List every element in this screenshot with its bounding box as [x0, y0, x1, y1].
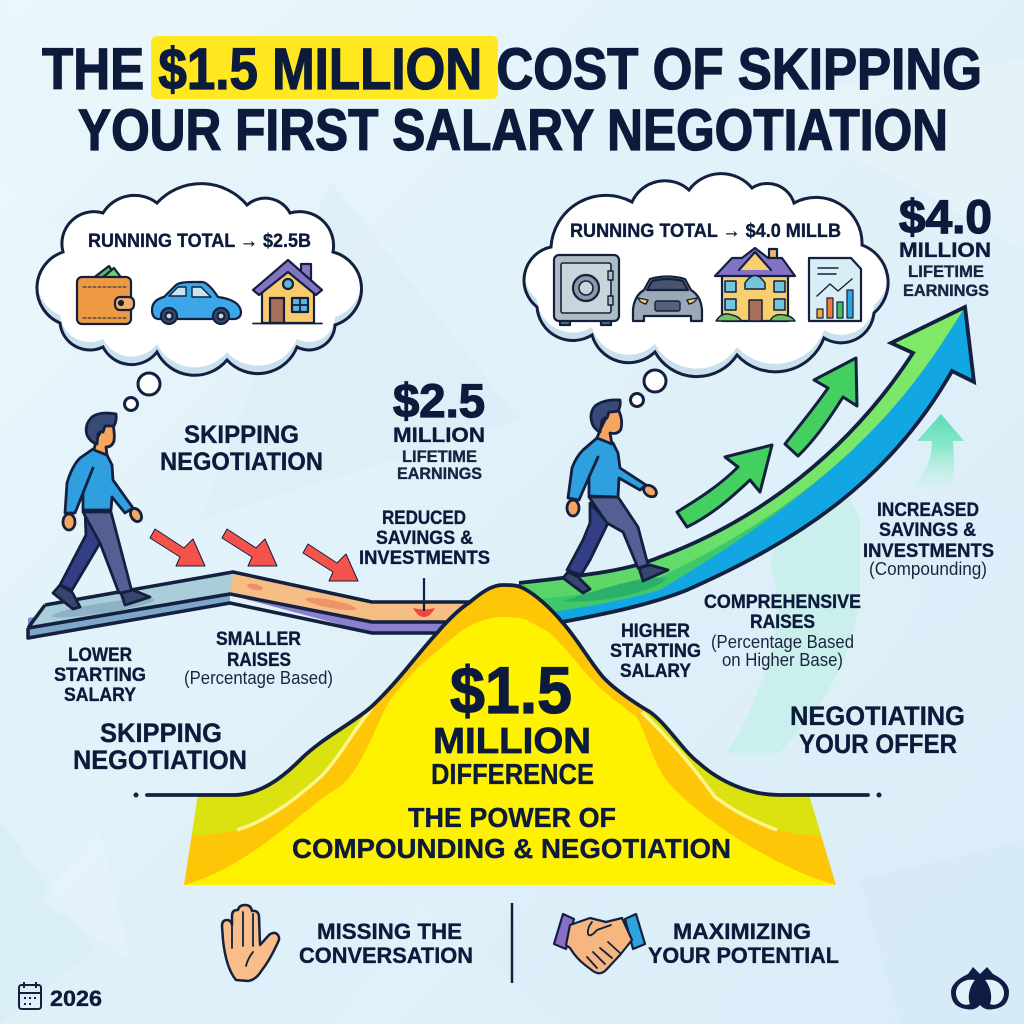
icon: handshake	[554, 914, 645, 973]
icon: blue car	[152, 282, 241, 324]
label: comprehensive raises: RAISES	[750, 611, 815, 633]
label: comprehensive raises: on Higher Base)	[722, 650, 843, 670]
label: lower starting salary: STARTING	[54, 664, 146, 686]
label: reduced savings: INVESTMENTS	[359, 547, 490, 569]
icon: stop hand	[222, 905, 279, 981]
declining path platform	[28, 572, 480, 638]
heading: negotiating your offer: NEGOTIATING	[790, 701, 965, 731]
front leg	[83, 512, 132, 593]
stat: $1.5 million difference	[431, 653, 594, 791]
heading: skipping negotiation lower: SKIPPING	[100, 718, 222, 748]
green arrow 2	[785, 358, 857, 456]
thought cloud: negotiating	[524, 166, 888, 406]
label: missing the conversation	[299, 919, 473, 968]
icon: report chart	[809, 258, 861, 321]
subheading: power of compounding: COMPOUNDING & NEGOTIATION	[292, 833, 731, 864]
stat: $4.0 million: $4.0	[899, 190, 992, 243]
label: smaller raises: (Percentage Based)	[184, 668, 333, 688]
heading: skipping negotiation lower	[73, 718, 247, 775]
label: increased savings: INVESTMENTS	[863, 540, 994, 562]
label: increased savings: SAVINGS &	[879, 519, 976, 541]
subheading: power of compounding: THE POWER OF	[408, 802, 616, 833]
label: reduced savings: SAVINGS &	[376, 527, 473, 549]
label: reduced savings: REDUCED	[382, 507, 466, 529]
stat: $4.0 million: MILLION	[899, 239, 991, 262]
heading: skipping negotiation top	[160, 421, 323, 476]
baseline right dots	[876, 792, 882, 798]
stat: $1.5 million difference: $1.5	[450, 653, 572, 727]
yellow hill	[147, 585, 868, 885]
subheading: power of compounding	[292, 802, 731, 864]
baseline left dots	[134, 792, 138, 798]
green arrow 1	[677, 445, 772, 527]
label: maximizing your potential: MAXIMIZING	[673, 919, 811, 944]
label: comprehensive raises: COMPREHENSIVE	[704, 591, 861, 613]
back leg	[60, 510, 100, 590]
icon: wallet	[77, 266, 134, 324]
icon: sports car	[633, 276, 702, 321]
title	[42, 36, 982, 163]
stat: $2.5 million: LIFETIME	[402, 447, 477, 466]
icon: calendar with year: 2026	[50, 986, 102, 1011]
label: lower starting salary: SALARY	[64, 684, 136, 706]
back leg	[567, 503, 608, 575]
label: smaller raises: SMALLER	[216, 628, 301, 650]
stat: $1.5 million difference: DIFFERENCE	[431, 759, 594, 791]
stat: $2.5 million	[393, 374, 485, 483]
stat: $2.5 million: $2.5	[393, 374, 485, 427]
divider	[511, 903, 513, 983]
stat: $1.5 million difference: MILLION	[433, 720, 591, 761]
label: missing the conversation: CONVERSATION	[299, 943, 473, 968]
label: higher starting salary	[610, 620, 701, 682]
label: lower starting salary	[54, 644, 146, 706]
icon: safe	[554, 255, 619, 325]
label: maximizing your potential	[648, 919, 839, 968]
teal compounding sweep	[727, 497, 925, 753]
person: skipping	[53, 413, 150, 609]
icon: mansion	[715, 248, 795, 321]
label: higher starting salary: HIGHER	[621, 620, 690, 642]
label: lower starting salary: LOWER	[68, 644, 132, 666]
label: comprehensive raises: (Percentage Based	[711, 632, 854, 652]
label: missing the conversation: MISSING THE	[317, 919, 462, 944]
person: negotiating	[563, 400, 668, 593]
label: increased savings: (Compounding)	[869, 559, 987, 579]
label: increased savings: INCREASED	[877, 499, 979, 521]
stat: $4.0 million: LIFETIME	[908, 262, 984, 281]
heading: skipping negotiation top: SKIPPING	[184, 421, 299, 449]
label: smaller raises: RAISES	[227, 649, 291, 671]
running total text: RUNNING TOTAL → $2.5B	[88, 230, 311, 252]
running total text: RUNNING TOTAL → $4.0 MILLB	[570, 220, 841, 242]
icon: logo	[951, 967, 1009, 1010]
label: maximizing your potential: YOUR POTENTIAL	[648, 943, 839, 968]
red arrow 2	[222, 529, 277, 566]
label: increased savings	[863, 499, 994, 579]
label: higher starting salary: SALARY	[620, 660, 691, 682]
front leg	[589, 497, 648, 568]
big growth arrow	[500, 307, 974, 625]
red arrow 3	[303, 544, 358, 581]
stat: $2.5 million: EARNINGS	[397, 464, 482, 483]
heading: skipping negotiation top: NEGOTIATION	[160, 448, 323, 476]
icon: calendar with year	[19, 982, 102, 1011]
heading: skipping negotiation lower: NEGOTIATION	[73, 745, 247, 775]
label: higher starting salary: STARTING	[610, 640, 701, 662]
label: smaller raises	[184, 628, 333, 688]
red arrow 1	[150, 529, 205, 566]
label: reduced savings	[359, 507, 490, 569]
thought cloud: skipping	[37, 176, 361, 410]
heading: negotiating your offer: YOUR OFFER	[799, 729, 957, 759]
icon: pale teal up arrow	[908, 414, 964, 490]
icon: house	[253, 260, 322, 324]
stat: $2.5 million: MILLION	[393, 424, 485, 447]
label: comprehensive raises	[704, 591, 861, 670]
stat: $4.0 million: EARNINGS	[903, 281, 989, 300]
heading: negotiating your offer	[790, 701, 965, 759]
stat: $4.0 million	[899, 190, 992, 300]
